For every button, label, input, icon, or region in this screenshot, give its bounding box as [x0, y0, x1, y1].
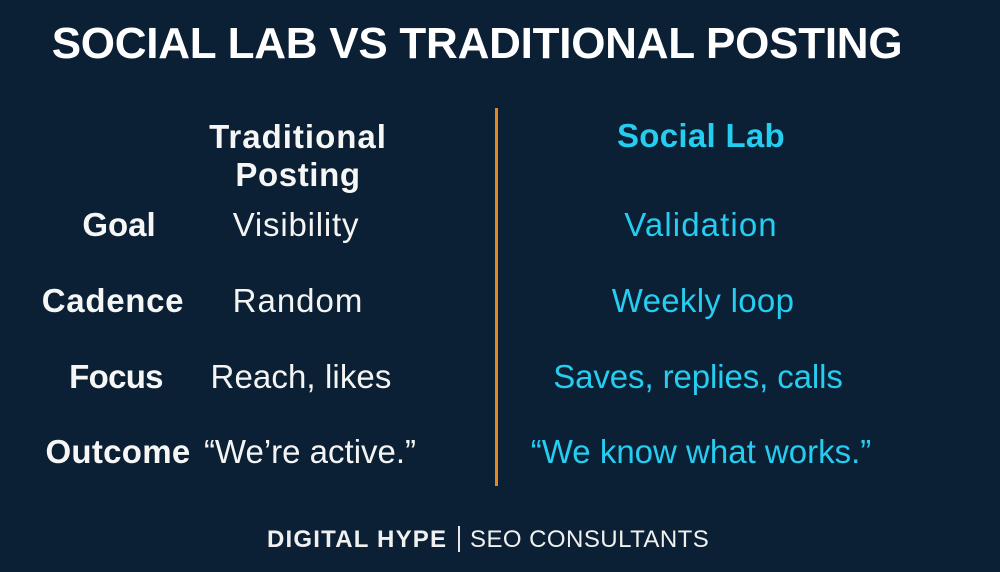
social lab value: We know what works: “We know what works.”	[531, 433, 871, 470]
footer: Digital Hype: DIGITAL HYPE	[267, 526, 447, 553]
traditional value: Reach, likes: Reach, likes	[211, 358, 391, 395]
social lab value: Weekly loop: Weekly loop	[612, 282, 794, 319]
traditional value: Visibility: Visibility	[233, 206, 359, 243]
column heading: Traditional Posting: Posting	[235, 156, 361, 193]
row label: Cadence: Cadence	[42, 282, 184, 319]
column heading: Traditional Posting	[209, 118, 387, 193]
footer: SEO Consultants: SEO CONSULTANTS	[470, 526, 709, 553]
row label: Outcome: Outcome	[45, 433, 191, 470]
footer: separator	[458, 526, 460, 552]
title: SOCIAL LAB VS TRADITIONAL POSTING	[52, 19, 902, 68]
column heading: Social Lab: Social Lab	[617, 117, 785, 154]
social lab value: Validation: Validation	[624, 206, 778, 243]
traditional value: Random: Random	[233, 282, 363, 319]
social lab value: Saves, replies, calls: Saves, replies, calls	[553, 358, 843, 395]
traditional value: We're active: “We’re active.”	[204, 433, 416, 470]
row label: Focus: Focus	[69, 358, 163, 395]
divider line	[495, 108, 498, 486]
column heading: Traditional Posting: Traditional	[209, 118, 387, 155]
footer brand	[267, 526, 709, 553]
row label: Goal: Goal	[82, 206, 156, 243]
